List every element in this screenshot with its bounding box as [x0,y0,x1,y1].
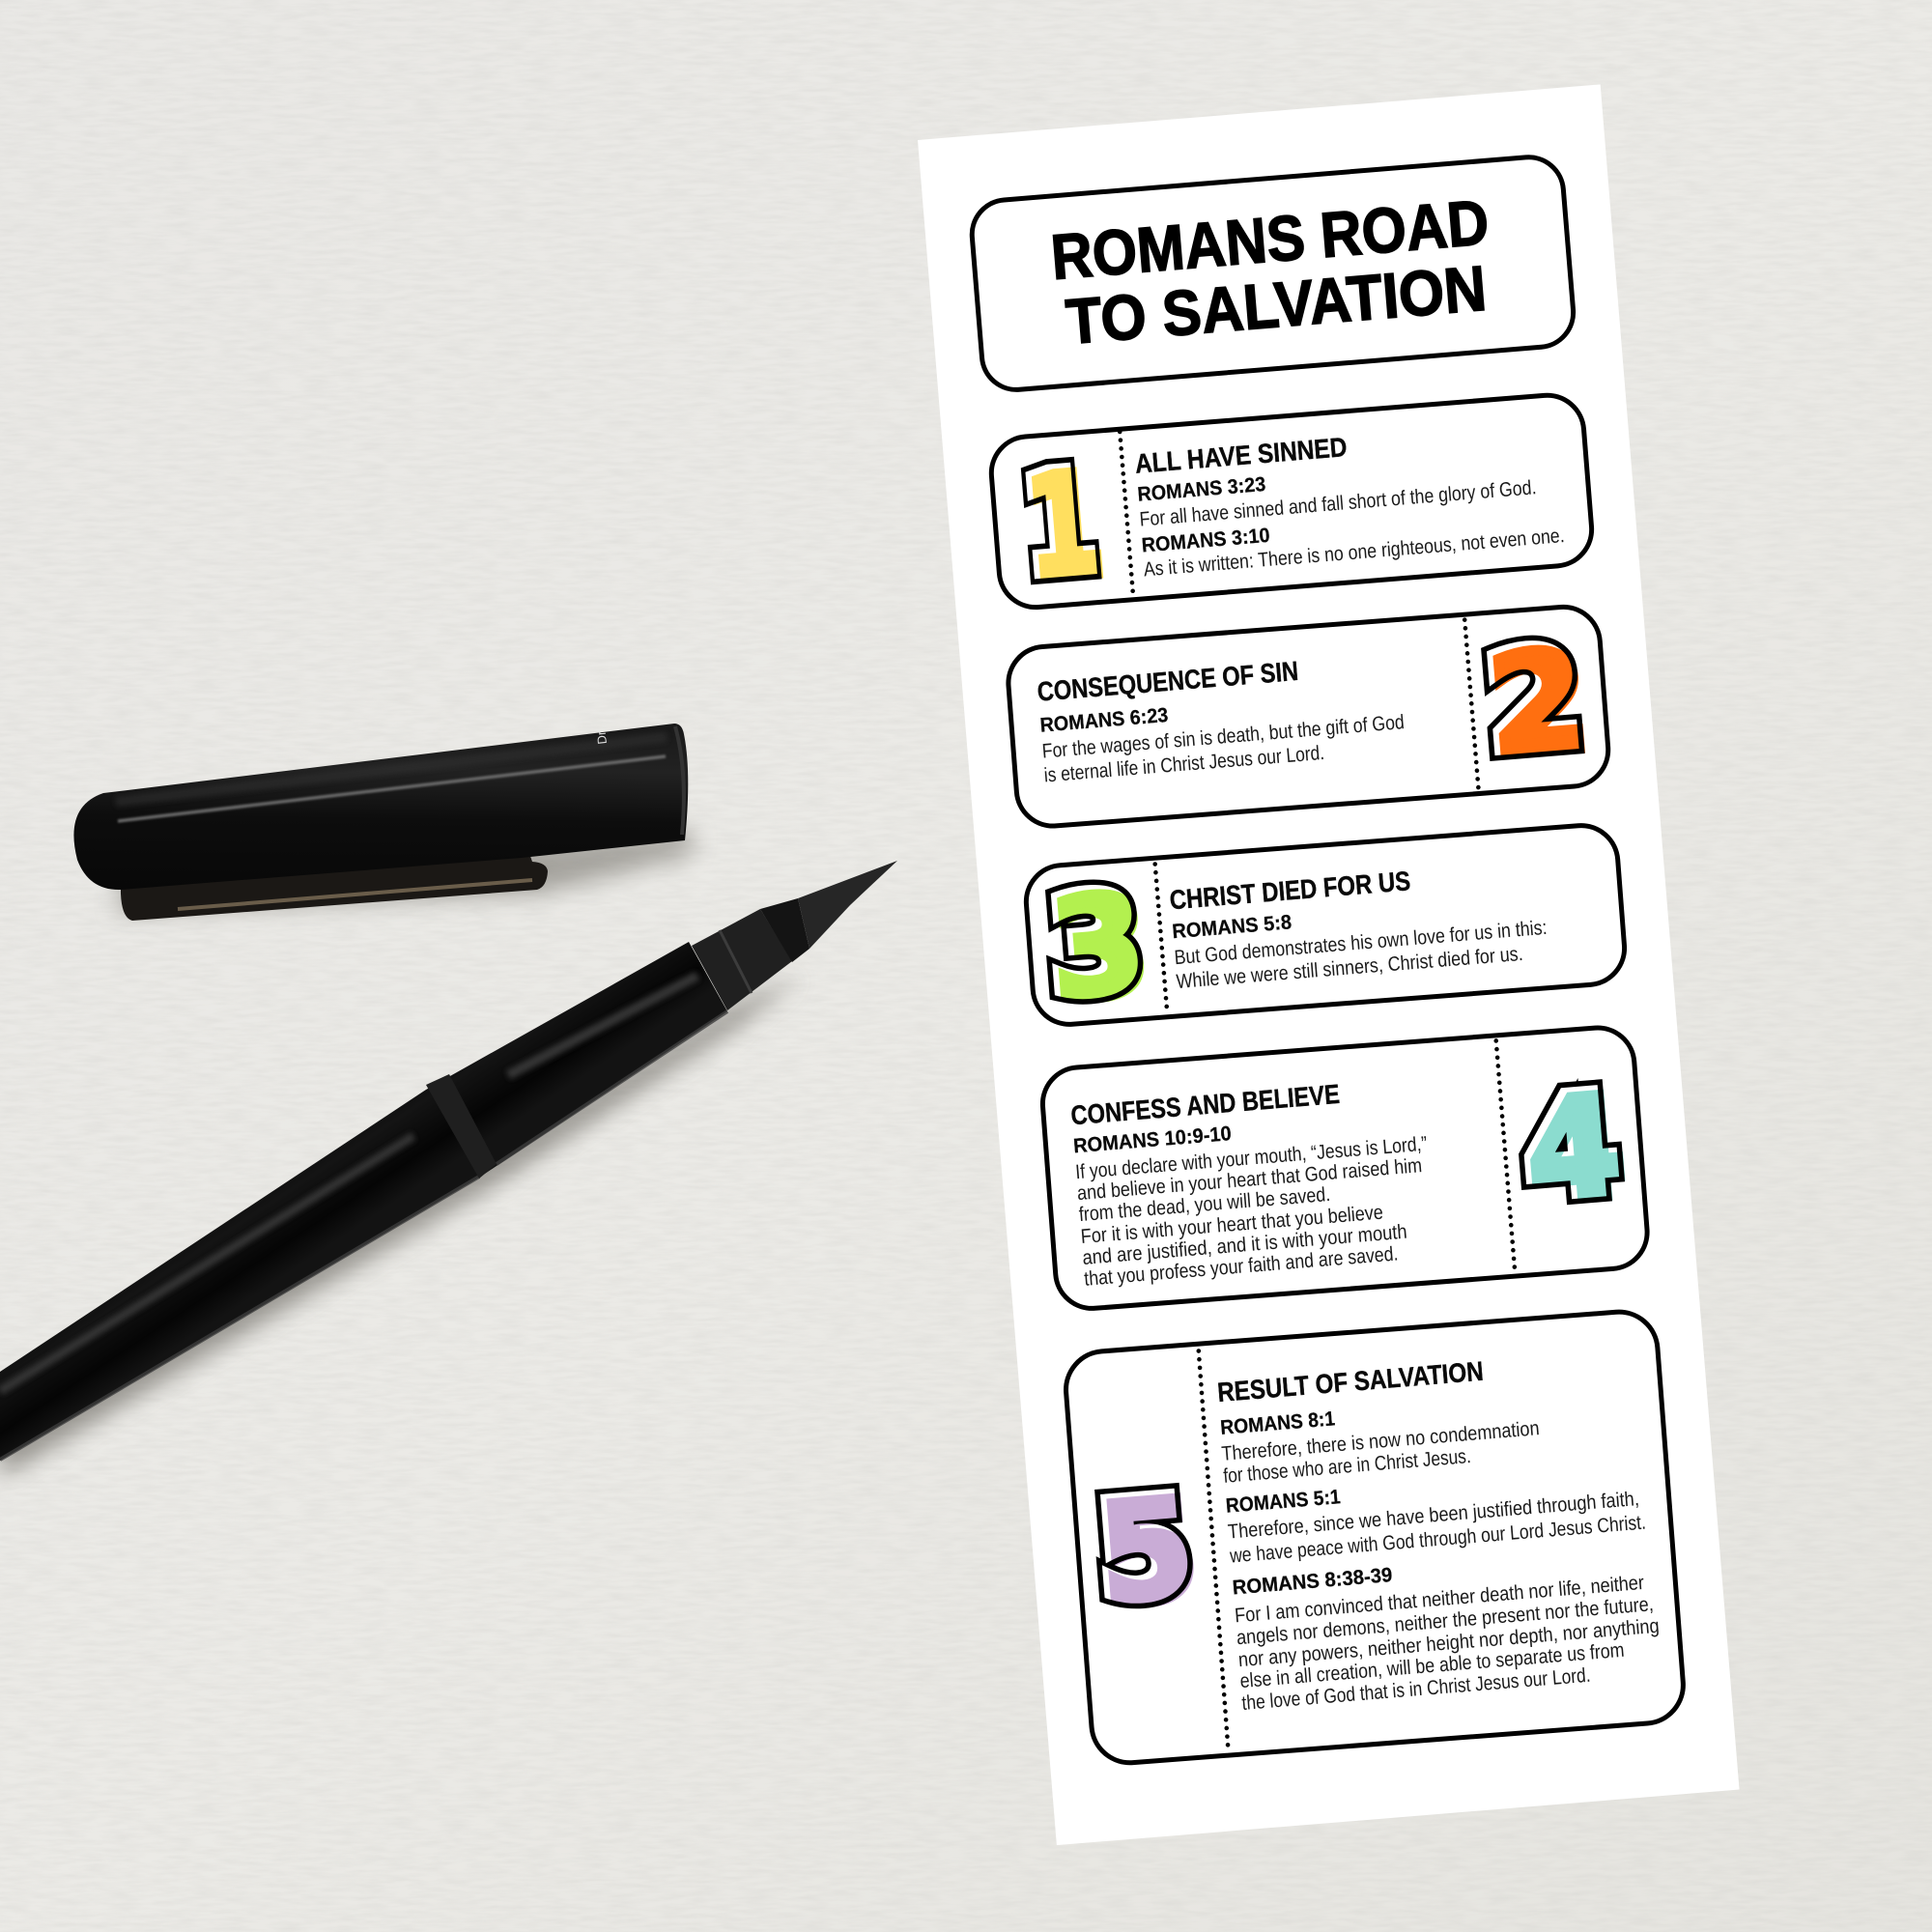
step 3 text: While we were still sinners, Christ died for us. [1176,943,1523,993]
step 3 text: But God demonstrates his own love for us in this: [1174,917,1548,969]
panel: step 5 result of salvation [1061,1306,1689,1769]
number 3: 3 [1047,867,1154,1032]
number 2: 2 [1479,617,1588,783]
number 1: 1 [1021,443,1109,612]
pen grip [692,909,792,1010]
number 4: 4 [1517,1062,1624,1231]
step 1 text: For all have sinned and fall short of the glory of God. [1139,476,1537,531]
step 3 text [1169,855,1549,993]
step 2 text: is eternal life in Christ Jesus our Lord. [1043,742,1325,787]
cap clip [121,831,548,921]
step 4 text: from the dead, you will be saved. [1078,1183,1331,1226]
cap imprint: Dr [594,729,610,745]
cap open end [675,726,684,835]
cap body [73,724,688,890]
bookmark card [918,84,1740,1845]
step 5 text [1214,1344,1663,1715]
pen lower edge [0,1011,727,1460]
step 5 text: the love of God that is in Christ Jesus our Lord. [1241,1664,1591,1715]
number 5: 5 [1095,1471,1203,1636]
cap highlight [118,756,666,821]
step 1 text: ROMANS 3:10 [1141,525,1270,557]
step 4 text: and believe in your heart that God raised him [1076,1154,1423,1205]
cap shadow [116,831,696,913]
step 4 text: For it is with your heart that you believe [1080,1202,1384,1248]
panel: step 1 all have sinned [988,391,1595,614]
step 1 text: As it is written: There is no one righteous, not even one. [1143,525,1565,581]
step 2 text: CONSEQUENCE OF SIN [1037,656,1299,707]
title text: ROMANS ROAD [1048,185,1492,293]
step 1 text: ALL HAVE SINNED [1134,432,1349,479]
pen cap [73,724,696,921]
step 5 text: nor any powers, neither height nor depth, nor anything [1237,1615,1660,1671]
pen highlights [508,976,697,1075]
step 3 text: CHRIST DIED FOR US [1169,866,1411,915]
step 3 text: ROMANS 5:8 [1172,911,1293,943]
step 5 text: else in all creation, will be able to separate us from [1239,1639,1625,1692]
step 5 text: we have peace with God through our Lord Jesus Christ. [1228,1512,1647,1568]
step 2 text: ROMANS 6:23 [1039,704,1169,737]
step 4 text [1069,1072,1436,1291]
step 1 text [1134,414,1565,581]
pen ring [426,1074,497,1179]
step 5 text: for those who are in Christ Jesus. [1223,1445,1472,1488]
pen shadow [0,976,802,1478]
title text: TO SALVATION [1064,252,1489,357]
pen nib [798,861,897,949]
brush pen [0,861,897,1478]
number 2: 2 [1485,621,1594,787]
step 4 text: If you declare with your mouth, “Jesus is Lord,” [1074,1133,1428,1183]
step 5 text: Therefore, since we have been justified through faith, [1227,1488,1640,1544]
step 4 text: ROMANS 10:9-10 [1072,1122,1233,1157]
panel: title [969,155,1576,392]
step 5 text: angels nor demons, neither the present nor the future, [1236,1593,1655,1649]
panel: step 3 christ died for us [1023,820,1629,1034]
card paper [918,84,1740,1845]
step 5 text: ROMANS 8:38-39 [1232,1564,1393,1599]
step 5 text: For I am convinced that neither death nor life, neither [1234,1572,1645,1627]
panel: step 4 confess and believe [1038,1022,1651,1314]
number 3: 3 [1040,862,1148,1028]
pen ferrule [760,898,810,962]
step 1 text: ROMANS 3:23 [1137,473,1266,506]
step 2 text [1037,647,1407,787]
number 5: 5 [1090,1466,1197,1633]
step 5 text: Therefore, there is now no condemnation [1221,1417,1540,1465]
number 1: 1 [1015,440,1103,608]
title text [1048,185,1496,358]
step 4 text: that you profess your faith and are saved. [1083,1242,1399,1291]
pen barrel [0,942,727,1461]
panel: step 2 consequence of sin [1005,601,1611,832]
step 5 text: RESULT OF SALVATION [1216,1356,1485,1407]
step 5 text: ROMANS 8:1 [1219,1407,1336,1439]
step 5 text: ROMANS 5:1 [1225,1486,1342,1518]
step 2 text: For the wages of sin is death, but the gift of God [1041,711,1406,763]
step 4 text: CONFESS AND BELIEVE [1069,1079,1341,1130]
step 4 text: and are justified, and it is with your mouth [1082,1221,1407,1269]
number 4: 4 [1522,1065,1630,1235]
